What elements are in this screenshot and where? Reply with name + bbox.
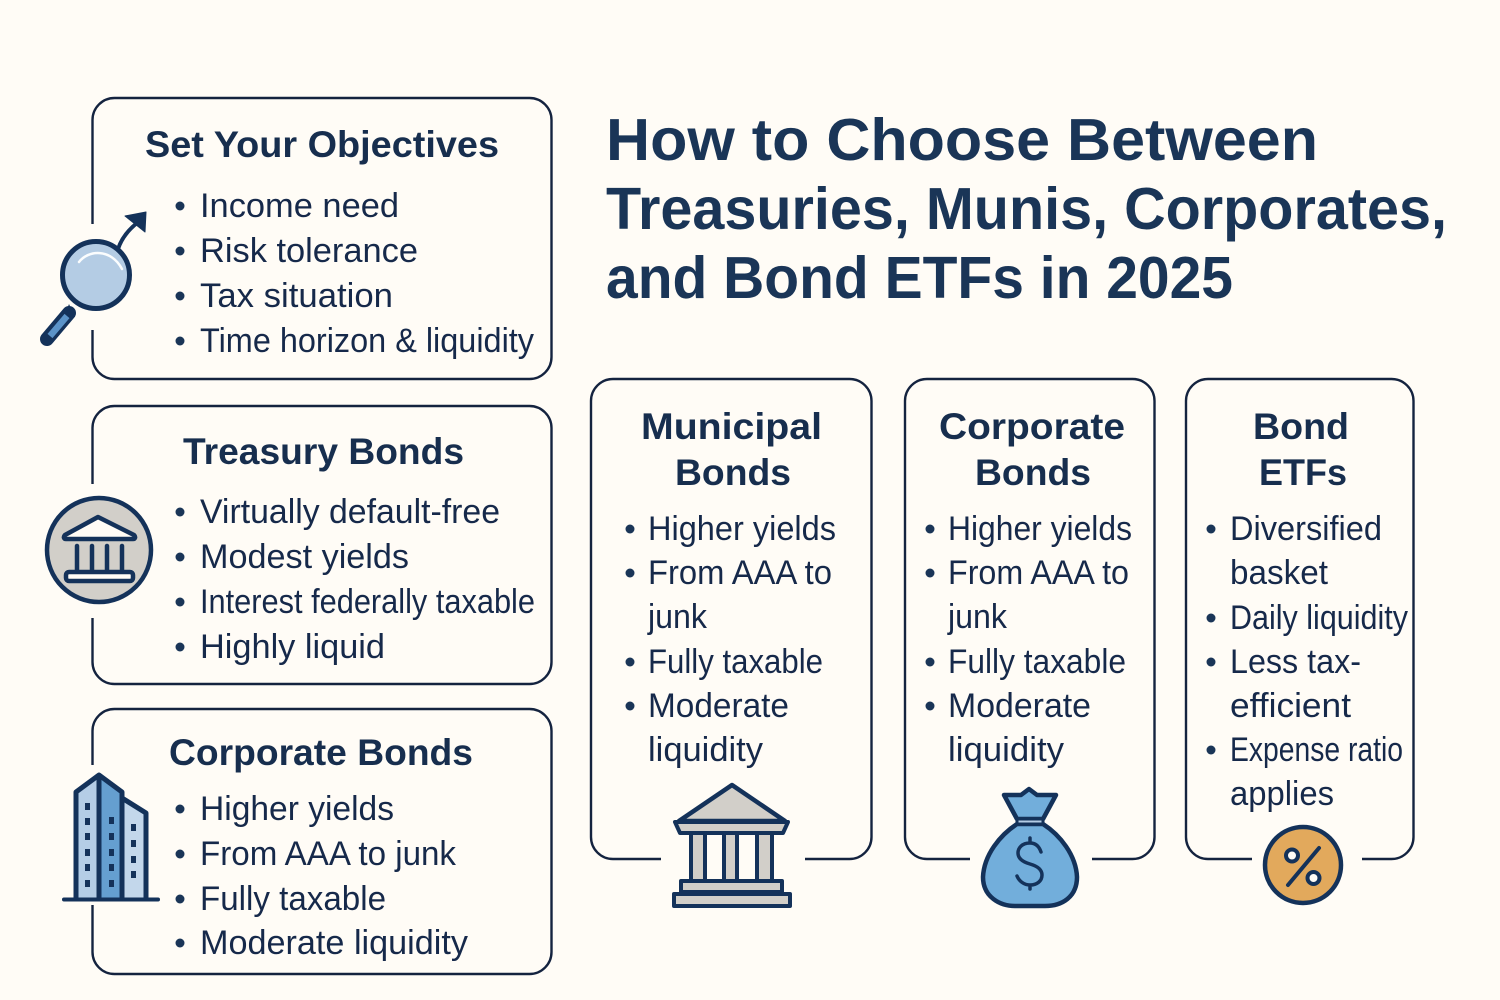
list: corporate: Fully taxable: [200, 880, 386, 918]
heading: bond etfs: [1253, 406, 1349, 493]
icon: money bag: [983, 789, 1077, 906]
list: corporate: Moderate: [948, 687, 1091, 725]
heading: bond etfs: Bond: [1253, 406, 1349, 447]
list: objectives: Time horizon & liquidity: [200, 322, 534, 360]
panel: set your objectives: [92, 98, 552, 379]
list: corporate: From AAA to: [948, 554, 1129, 592]
list: etfs: Diversified: [1230, 510, 1382, 548]
icon: magnifying glass with arrow: [47, 212, 146, 339]
list: corporate: From AAA to junk: [200, 835, 457, 873]
list: etfs: Less tax-: [1230, 643, 1361, 681]
list: etfs: Daily liquidity: [1230, 599, 1408, 637]
list: treasury: Interest federally taxable: [200, 583, 535, 621]
list: objectives: Tax situation: [200, 277, 393, 315]
list: municipal: junk: [647, 598, 708, 636]
icon: treasury building in circle: [47, 498, 151, 602]
list: objectives: Income need: [200, 187, 399, 225]
list: corporate: Fully taxable: [948, 643, 1126, 681]
list: municipal: From AAA to: [648, 554, 832, 592]
heading: corporate bonds: [939, 406, 1125, 493]
title: [606, 107, 1447, 311]
icon: percent coin: [1265, 827, 1341, 903]
list: municipal: liquidity: [648, 731, 763, 769]
list: etfs: [1206, 510, 1408, 813]
list: municipal: [626, 510, 836, 769]
panel: municipal bonds: [591, 379, 872, 859]
list: corporate: [176, 790, 468, 962]
list: treasury: Modest yields: [200, 538, 409, 576]
icon: office buildings: [64, 775, 158, 900]
panel: treasury bonds: [92, 406, 552, 684]
title: How to Choose Between: [606, 107, 1318, 173]
heading: bond etfs: ETFs: [1259, 452, 1347, 493]
heading: corporate bonds: Corporate Bonds: [169, 732, 473, 773]
heading: treasury bonds: Treasury Bonds: [183, 431, 464, 472]
list: objectives: Risk tolerance: [200, 232, 418, 270]
panel: bond etfs: [1186, 379, 1414, 859]
list: corporate: Higher yields: [200, 790, 394, 828]
list: objectives: [176, 187, 534, 360]
heading: municipal bonds: Municipal: [641, 406, 822, 447]
list: etfs: basket: [1230, 554, 1329, 592]
list: corporate: junk: [947, 598, 1008, 636]
list: municipal: Moderate: [648, 687, 789, 725]
title: Treasuries, Munis, Corporates,: [606, 176, 1447, 242]
heading: corporate bonds: Corporate: [939, 406, 1125, 447]
list: municipal: Fully taxable: [648, 643, 823, 681]
list: treasury: Highly liquid: [200, 628, 385, 666]
heading: corporate bonds: Bonds: [975, 452, 1091, 493]
list: etfs: Expense ratio: [1230, 731, 1403, 769]
list: treasury: [176, 493, 535, 666]
heading: set your objectives: Set Your Objectives: [145, 124, 499, 165]
heading: municipal bonds: [641, 406, 822, 493]
panel: corporate bonds left: [92, 709, 552, 974]
list: etfs: efficient: [1230, 687, 1352, 725]
list: corporate: Moderate liquidity: [200, 924, 468, 962]
panel: corporate bonds right: [905, 379, 1154, 859]
list: corporate: [926, 510, 1132, 769]
list: corporate: liquidity: [948, 731, 1064, 769]
list: etfs: applies: [1230, 775, 1334, 813]
heading: municipal bonds: Bonds: [675, 452, 791, 493]
icon: classical bank building: [674, 785, 790, 906]
title: and Bond ETFs in 2025: [606, 245, 1233, 311]
list: corporate: Higher yields: [948, 510, 1132, 548]
list: municipal: Higher yields: [648, 510, 836, 548]
list: treasury: Virtually default-free: [200, 493, 500, 531]
